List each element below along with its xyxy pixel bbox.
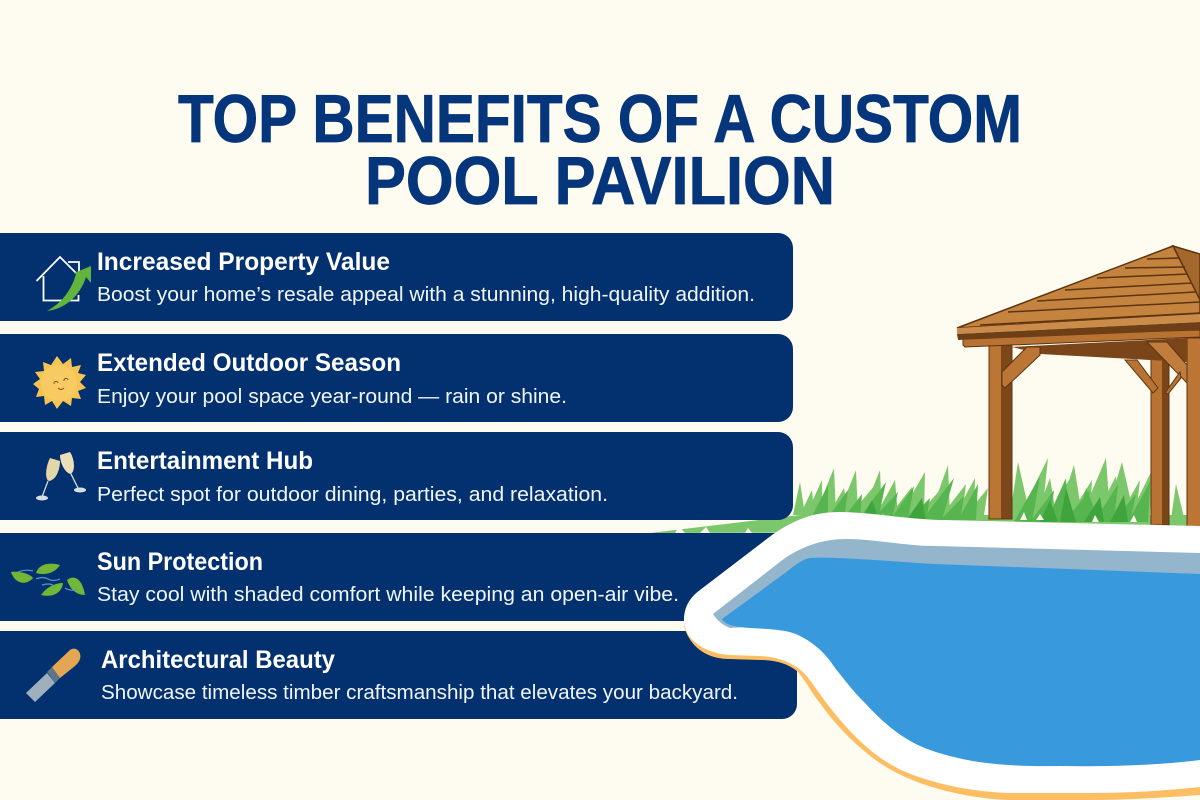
panel: extended outdoor season: Enjoy your pool space year-round — rain or shine. [97,386,567,408]
panel: architectural beauty: Architectural Beauty [101,646,335,674]
title [178,81,1022,219]
panel: sun protection: Stay cool with shaded comfort while keeping an open-air vibe. [97,584,679,606]
illustration: grass [650,458,1200,533]
icon: chisel [26,649,80,702]
pavilion beam [963,330,1200,347]
panel: entertainment hub: Entertainment Hub [97,447,313,475]
panel: sun protection [0,533,793,621]
panel: architectural beauty [0,631,797,719]
pavilion roof [957,246,1200,340]
pool coping shadow [684,620,1200,800]
pavilion posts [989,338,1200,527]
panel: increased property value: Boost your home’s resale appeal with a stunning, high-quality addition. [97,284,755,306]
pool water [722,558,1200,766]
icon: house with arrow [36,257,91,311]
panel: sun protection: Sun Protection [97,548,263,576]
icon: leaves and breeze [11,564,85,596]
illustration: pavilion [957,246,1200,527]
panel: increased property value: Increased Property Value [97,248,390,276]
title: POOL PAVILION [365,143,835,219]
illustration: pool [684,512,1200,800]
pool coping [684,512,1200,793]
panel: entertainment hub: Perfect spot for outdoor dining, parties, and relaxation. [97,484,608,506]
pool wall [713,539,1200,628]
panel: entertainment hub [0,432,793,520]
panel: increased property value [0,233,793,321]
panel: extended outdoor season: Extended Outdoor Season [97,349,401,377]
pavilion under-beam [1012,338,1187,362]
pavilion braces [1002,342,1187,394]
panel: extended outdoor season [0,334,793,422]
title: TOP BENEFITS OF A CUSTOM [178,81,1022,157]
panel: architectural beauty: Showcase timeless timber craftsmanship that elevates your backyard. [101,682,738,704]
icon: champagne glasses [36,452,86,500]
icon: smiling sun [33,356,86,409]
